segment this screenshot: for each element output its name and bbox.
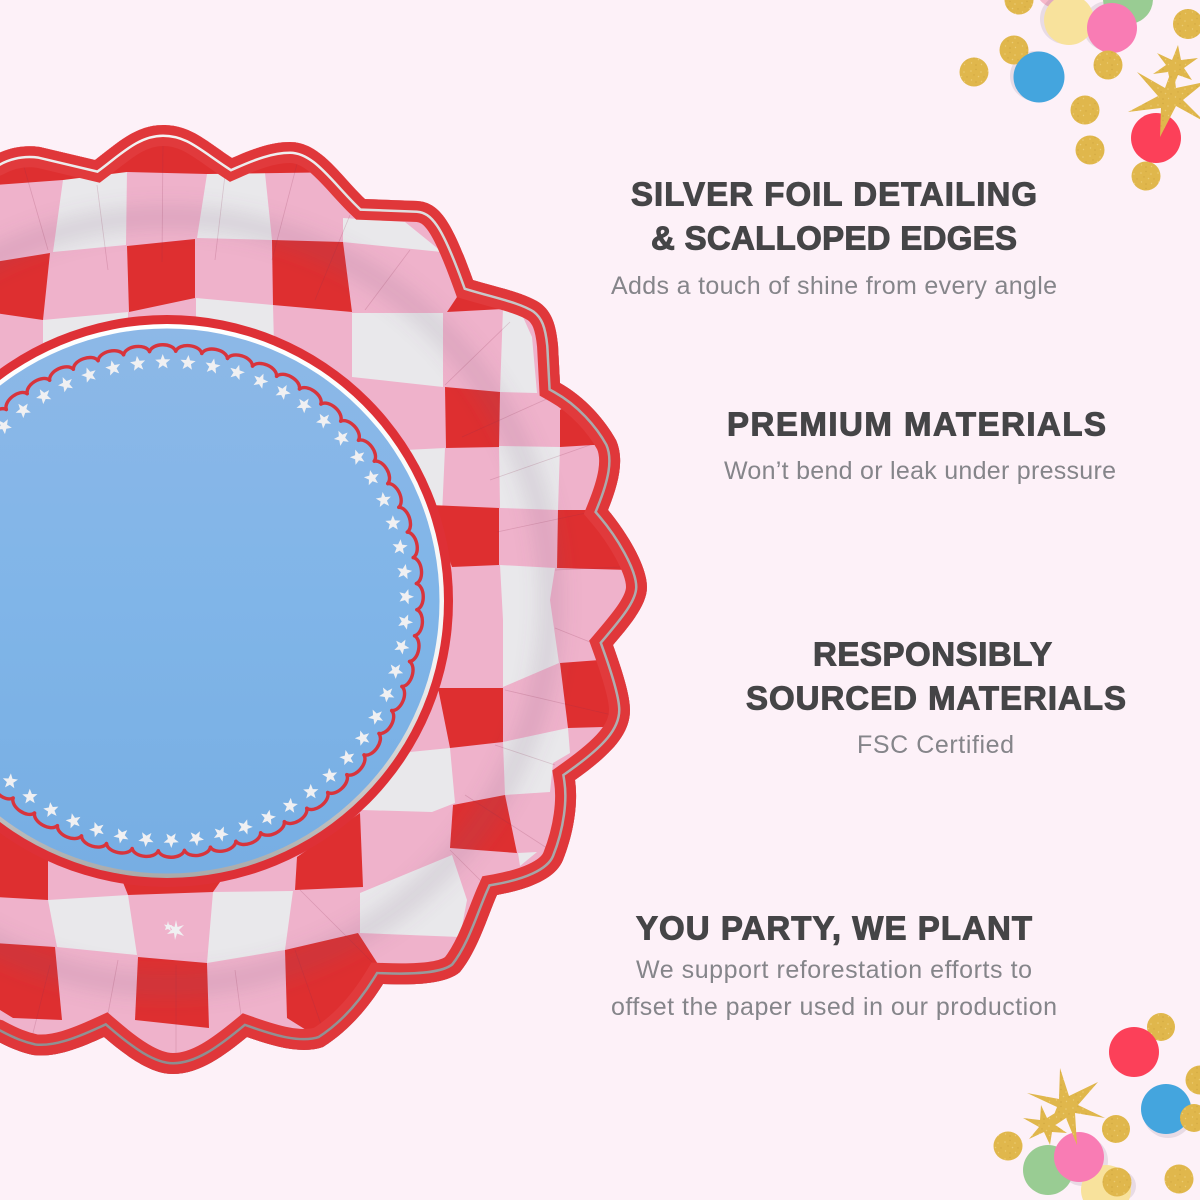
red scalloped band [0,125,647,1074]
blue dot [1014,52,1064,102]
gold large star [1027,1068,1105,1145]
gold small star [1023,1105,1067,1145]
heading: PREMIUM MATERIALS [727,406,1106,442]
gingham rim [0,100,655,1080]
blue centre [0,328,440,874]
blue dot [1141,1084,1191,1134]
heading: & SCALLOPED EDGES [651,220,1017,256]
description [611,956,1057,1021]
soft shadows [1010,0,1133,101]
gold small star [1153,45,1198,90]
outer red edge [0,125,647,1074]
gold dots front [994,1104,1200,1196]
feature 4: you party, we plant [611,910,1057,1021]
confetti: top right [960,0,1200,190]
heading: SILVER FOIL DETAILING [631,176,1037,212]
green dot [1023,1145,1073,1195]
yellow dot [1044,0,1094,45]
feature 3: responsibly sourced [746,636,1126,759]
fold creases [22,140,620,1070]
scalloped border and stars [0,345,423,857]
white gingham squares [43,170,570,963]
silver foil line [0,125,647,1074]
description: Adds a touch of shine from every angle [611,272,1057,300]
description: We support reforestation efforts to [636,956,1032,984]
foil ring [0,324,444,878]
red gingham squares [0,100,630,1045]
red dot [1109,1027,1159,1077]
pale pink dot [1036,0,1076,8]
heading: YOU PARTY, WE PLANT [636,910,1032,946]
feature 1: foil detailing [611,176,1057,300]
paper plate [0,100,655,1080]
gold dots behind [1147,1013,1200,1094]
icon: foil sparkle on rim [164,920,184,940]
heading [746,636,1126,716]
heading: RESPONSIBLY [813,636,1052,672]
heading [631,176,1037,256]
pink dot [1087,3,1137,53]
green dot [1103,0,1153,24]
description: offset the paper used in our production [611,993,1057,1021]
gold large star [1128,66,1200,137]
rim fold shading [0,217,551,985]
centre circle [0,315,453,887]
yellow dot [1081,1165,1131,1200]
soft shadows [1058,1088,1193,1200]
pink dot [1054,1132,1104,1182]
feature 2: premium materials [724,406,1116,485]
description: FSC Certified [857,731,1014,759]
red dot [1131,113,1181,163]
heading: SOURCED MATERIALS [746,680,1126,716]
description: Won’t bend or leak under pressure [724,457,1116,485]
confetti: bottom right [994,1013,1200,1200]
gold dots [960,0,1200,190]
red ring [0,315,453,887]
